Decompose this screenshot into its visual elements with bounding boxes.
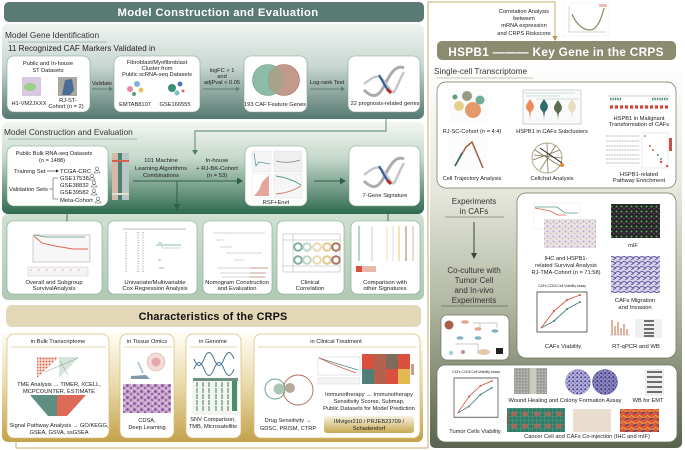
- box: bulk RNA-seq datasets: (n = 1488): [39, 158, 65, 164]
- title banner: Model Construction and Evaluation: Model Construction and Evaluation: [117, 7, 319, 19]
- box: in clinical treatment: in Clinical Treatment: [310, 339, 362, 345]
- text: correlation analysis: and CRPS Riskscore: [497, 31, 551, 37]
- box: bulk RNA-seq datasets: TCGA-CRC: [60, 169, 92, 175]
- arrow: logFC filter: and: [217, 74, 227, 80]
- survival curve and IHC: IHC and HSPB1-: [544, 256, 588, 262]
- heading: model gene identification: Model Gene Identification: [5, 30, 99, 40]
- box: in tissue omics: CDSA,: [138, 418, 156, 424]
- malignant transformation dots: Transformation of CAFs: [609, 122, 669, 128]
- heatmap: [362, 354, 414, 384]
- heading: experiments in CAFs: Experiments: [452, 197, 496, 206]
- malignant transformation dots: [608, 92, 670, 128]
- text: in-house cohort: In-house: [206, 158, 229, 164]
- box: ST datasets: ST Datasets: [32, 68, 64, 74]
- banner: HSPB1 key gene: HSPB1 ——— Key Gene in the CRPS: [448, 45, 664, 59]
- panel: model construction and evaluation: [2, 122, 424, 214]
- mIF image: [611, 204, 660, 249]
- colony formation plates: Wound Healing and Colony Formation Assay: [508, 398, 622, 404]
- box: ST datasets: Cohort (n = 2): [48, 104, 84, 110]
- box: RSF+Enet: [245, 146, 307, 206]
- box: Cox regression forest plot: Cox Regression Analysis: [122, 286, 188, 292]
- box: in genome: in Genome: [199, 339, 227, 345]
- text: correlation analysis: mRNA expression: [501, 23, 547, 29]
- text: in-house cohort: + RJ-BK-Cohort: [196, 166, 238, 172]
- survival curves: [318, 357, 360, 384]
- box: bulk RNA-seq datasets: [7, 146, 108, 206]
- arrow: validate: [92, 81, 113, 92]
- drug sensitivity venn: [260, 375, 316, 432]
- box: 7-gene signature: 7-Gene Signature: [363, 193, 407, 199]
- box: scRNA-seq datasets: Fibroblast/Myofibroblast: [127, 60, 188, 66]
- box: bulk RNA-seq datasets: Validation Sets: [9, 187, 48, 193]
- text: machine learning: Learning Algorithms: [135, 166, 187, 172]
- box: comparison with other signatures: [351, 221, 420, 294]
- WB for EMT: WB for EMT: [633, 398, 664, 404]
- heading: co-culture: Tumor Cell: [455, 276, 494, 285]
- heading: model construction: Model Construction and Evaluation: [4, 127, 133, 137]
- box: in clinical treatment: Immunotherapy → Immunotherapy: [325, 392, 413, 398]
- tumor cell viability chart: [449, 370, 501, 435]
- box: in genome: [186, 334, 241, 438]
- pathway enrichment: Pathway Enrichment: [613, 178, 665, 184]
- UMAP: RJ-SC-Cohort (n = 4:4): [443, 129, 501, 135]
- text: in-house cohort: (n = 53): [207, 173, 227, 179]
- panel: characteristics: [2, 333, 423, 442]
- cell trajectory: Cell Trajectory Analysis: [443, 176, 502, 182]
- mIF tissue: [620, 409, 659, 432]
- gold datasets box: [324, 416, 414, 433]
- box: in bulk transcriptome: in Bulk Transcriptome: [31, 339, 85, 345]
- box: in bulk transcriptome: GSEA, GSVA, ssGSEA: [30, 430, 89, 436]
- mIF image: mIF: [628, 243, 638, 249]
- arrow: logFC filter: adjPval < 0.05: [204, 80, 240, 86]
- drug sensitivity venn: Drug Sensitivity →: [265, 418, 311, 424]
- panel: co-culture experiments: [437, 365, 677, 442]
- box: in tissue omics: Deep Learning: [128, 425, 166, 431]
- tumor cell viability chart: Tumor Cells Viability: [449, 429, 501, 435]
- box: venn of CAF feature genes: 193 CAF Feature Genes: [244, 102, 306, 108]
- box: ST datasets: Public and In-house: [23, 61, 73, 67]
- UMAP: [443, 88, 501, 135]
- heading: co-culture: [441, 266, 508, 306]
- caption: co-injection: Cancer Cell and CAFs Co-injection (IHC and mIF): [524, 434, 650, 440]
- box: clinical correlation: [277, 221, 344, 294]
- subheading: CAF markers: 11 Recognized CAF Markers Validated in: [8, 44, 155, 53]
- heading: single-cell transcriptome: Single-cell Transcriptome: [434, 66, 528, 76]
- gold datasets box: IMvigor210 / PRJEB23709 /: [334, 419, 405, 425]
- text: correlation analysis: [497, 9, 551, 37]
- box: in clinical treatment: Sensitivity Scores, Submap,: [334, 399, 405, 405]
- box: clinical correlation: Correlation: [296, 286, 324, 292]
- box: scRNA-seq datasets: GSE166555: [160, 102, 190, 108]
- survival curve and IHC: RJ-TMA-Cohort (n = 71:58): [531, 270, 601, 276]
- colony formation plates: [508, 370, 622, 404]
- box: in bulk transcriptome: [7, 334, 109, 438]
- pathway enrichment: HSPB1-related: [620, 172, 658, 178]
- violin plot: HSPB1 in CAFs Subclusters: [516, 129, 588, 135]
- banner: Characteristics of the CRPS: [6, 305, 421, 327]
- panel: model gene identification: [2, 24, 424, 119]
- box: scRNA-seq datasets: Cluster from: [142, 66, 173, 72]
- box: in tissue omics: in Tissue Omics: [127, 339, 167, 345]
- box: nomogram: Nomogram Construction: [205, 280, 269, 286]
- box: Cox regression forest plot: Univariate/Multivariable: [124, 280, 186, 286]
- tumor photo: [507, 408, 565, 432]
- box: bulk RNA-seq datasets: GSE39582: [60, 190, 89, 196]
- arrow: experiments: [471, 222, 477, 259]
- panel: single-cell transcriptome: [437, 82, 676, 188]
- text: machine learning: [135, 158, 187, 179]
- cell trajectory: [443, 136, 502, 182]
- arrow: down to evaluation: [174, 181, 180, 210]
- box: bulk RNA-seq datasets: GSE17538: [60, 176, 90, 182]
- arrow: logFC filter: [203, 68, 240, 92]
- box: in clinical treatment: Public Datasets for Model Prediction: [323, 406, 415, 412]
- box: ST datasets: [7, 56, 90, 112]
- box: in genome: SNV Comparison,: [190, 417, 236, 423]
- title banner: Model Construction and Evaluation: [4, 2, 424, 22]
- panel: HSPB1 backdrop: [430, 62, 682, 448]
- pathway enrichment: [606, 133, 672, 184]
- box: 22 prognosis-related genes: [348, 56, 420, 112]
- transwell image: CAFs Migration: [615, 298, 655, 304]
- box: in clinical treatment: [254, 334, 420, 438]
- CAFs viability chart: CAFs Viability: [545, 344, 581, 350]
- malignant transformation dots: HSPB1 in Malignant: [614, 116, 665, 122]
- wound healing image: [514, 368, 547, 394]
- box: in genome: TMB, Microsatellite: [189, 424, 237, 430]
- text: correlation analysis: Correlation Analysis: [499, 9, 549, 15]
- box: ST datasets: RJ-ST-: [59, 98, 77, 104]
- box: in bulk transcriptome: Signal Pathway Analysis → GO/KEGG,: [10, 423, 109, 429]
- box: survival analysis: SurvivalAnalysis: [33, 286, 75, 292]
- box: venn of CAF feature genes: [244, 56, 307, 112]
- text: correlation analysis: between: [513, 16, 535, 22]
- text: machine learning: Combinations: [143, 173, 179, 179]
- box: survival analysis: Overall and Subgroup: [25, 280, 83, 286]
- RT-qPCR and WB: [610, 319, 662, 350]
- gold datasets box: Schadendorf: [353, 426, 386, 432]
- panel: experiments in CAFs: [517, 193, 676, 358]
- box: 7-gene signature: [349, 146, 420, 206]
- box: scRNA-seq datasets: [114, 56, 200, 112]
- panel: evaluation results: [2, 214, 424, 300]
- box: survival analysis: [7, 221, 102, 294]
- violin plot: [516, 90, 588, 135]
- survival curve and IHC: [531, 203, 601, 276]
- box: bulk RNA-seq datasets: Public Bulk RNA-seq Datasets: [16, 151, 93, 157]
- heading: co-culture: Co-culture with: [447, 266, 501, 275]
- drug sensitivity venn: GDSC, PRISM, CTRP: [260, 426, 316, 432]
- box: in bulk transcriptome: MCPCOUNTER, ESTIMATE: [23, 389, 95, 395]
- IHC tissue: [573, 409, 611, 432]
- arrow: validate: Validate: [92, 81, 112, 87]
- CAFs viability chart: [537, 284, 587, 350]
- heatmap strip: [112, 153, 129, 200]
- box: comparison with other signatures: Comparison with: [363, 280, 407, 286]
- box: clinical correlation: Clinical: [300, 280, 320, 286]
- connector: to evaluation boxes: [67, 112, 388, 221]
- cellchat: Cellchat Analysis: [530, 176, 574, 182]
- box: 22 prognosis-related genes: 22 prognosis-related genes: [351, 101, 420, 107]
- box: ST datasets: H1-VM2JXXX: [11, 101, 47, 107]
- text: machine learning: 101 Machine: [144, 158, 179, 164]
- survival curve and IHC: related Survival Analysis: [535, 263, 597, 269]
- box: scRNA-seq datasets: Public scRNA-seq Datasets: [122, 72, 192, 78]
- box: comparison with other signatures: other Signatures: [363, 286, 407, 292]
- volcano plot: [564, 3, 609, 36]
- gold connector line: [16, 2, 558, 448]
- box: bulk RNA-seq datasets: Meta-Cohort: [60, 198, 93, 204]
- arrow: into RSF+Enet: [133, 178, 243, 184]
- box: bulk RNA-seq datasets: Training Set: [14, 169, 46, 175]
- box: in-vivo schematic: [441, 315, 509, 360]
- arrow: logFC filter: logFC > 1: [210, 68, 234, 74]
- box: Cox regression forest plot: [108, 221, 197, 294]
- heading: experiments in CAFs: in CAFs: [460, 207, 488, 216]
- box: in bulk transcriptome: TME Analysis → TIMER, XCELL,: [17, 382, 101, 388]
- transwell image: [611, 256, 660, 311]
- box: RSF+Enet: RSF+Enet: [263, 200, 290, 206]
- heading: experiments in CAFs: [445, 197, 504, 217]
- arrow: log-rank test: [310, 80, 345, 92]
- text: in-house cohort: [196, 158, 238, 179]
- WB for EMT: [633, 369, 664, 404]
- cellchat: [530, 143, 574, 182]
- box: nomogram: and Evaluation: [218, 286, 256, 292]
- banner: Characteristics of the CRPS: Characteristics of the CRPS: [139, 311, 287, 323]
- box: in tissue omics: [120, 334, 174, 438]
- banner: HSPB1 key gene: [437, 41, 676, 60]
- box: bulk RNA-seq datasets: GSE38832: [60, 183, 89, 189]
- heading: co-culture: Experiments: [452, 296, 496, 305]
- box: nomogram: [203, 221, 272, 294]
- heading: co-culture: and In-vivo: [454, 286, 494, 295]
- RT-qPCR and WB: RT-qPCR and WB: [612, 344, 660, 350]
- tumor cell viability chart: CAFs CCK8 Cell Viability Assay: [452, 370, 500, 374]
- transwell image: and Invasion: [618, 305, 652, 311]
- arrow: log-rank test: Log-rank Test: [310, 80, 345, 86]
- CAFs viability chart: CAFs CCK8 Cell Viability Assay: [538, 284, 586, 288]
- box: scRNA-seq datasets: EMTAB8107: [119, 102, 151, 108]
- arrow: to 7-gene signature: [314, 178, 346, 184]
